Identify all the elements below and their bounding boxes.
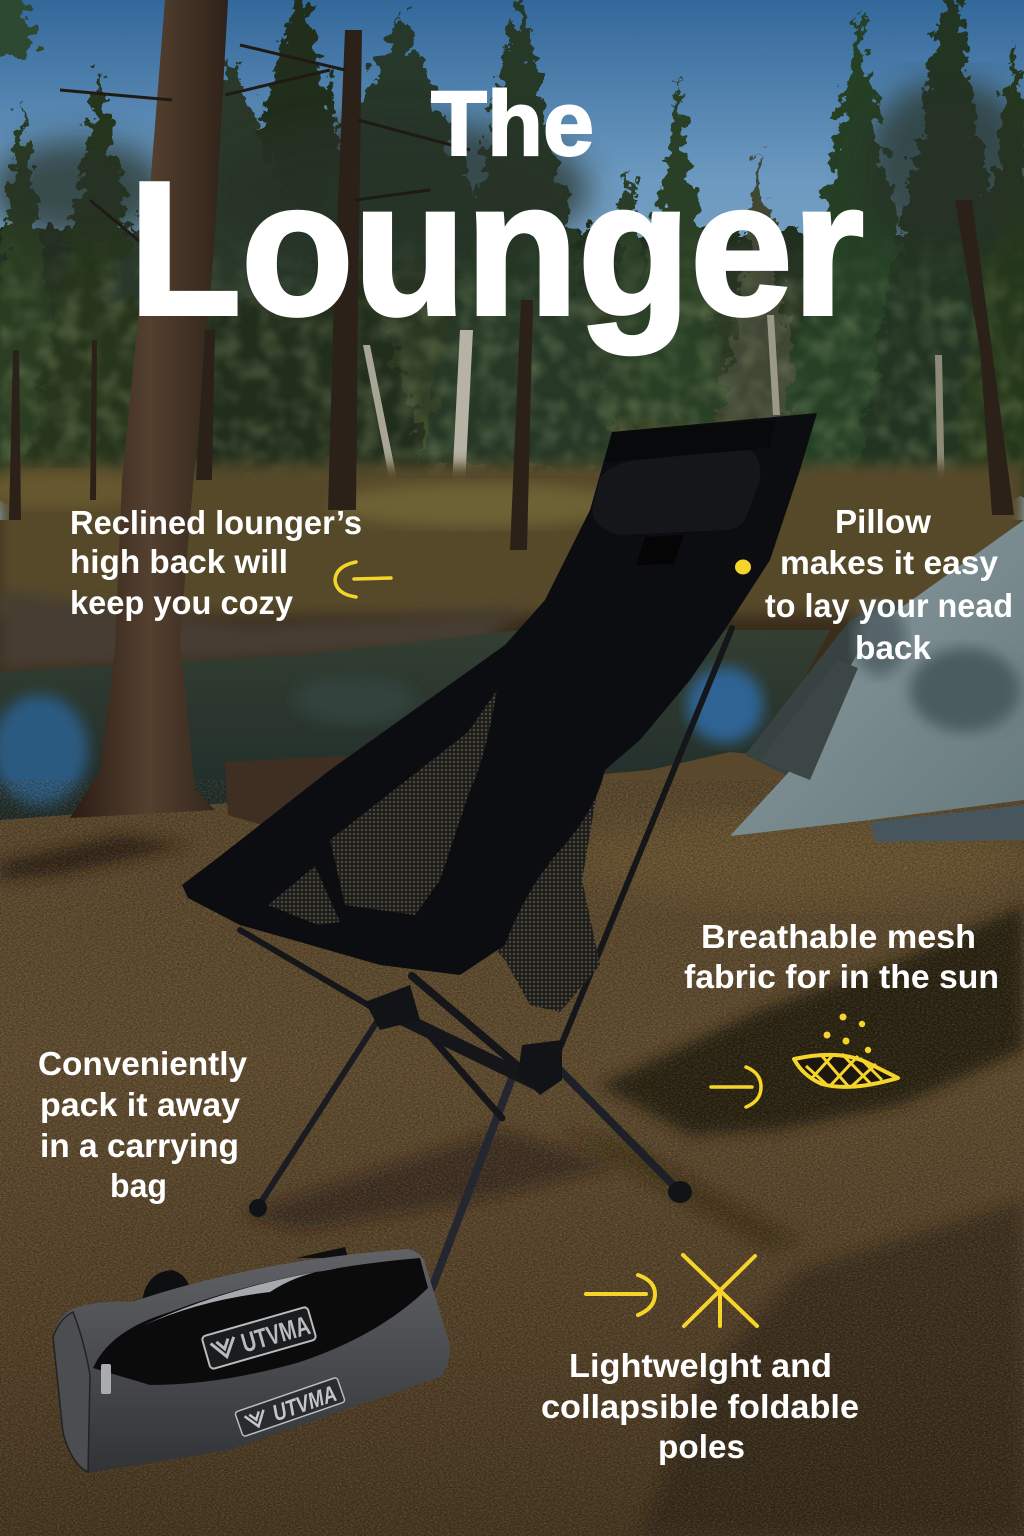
head pillow: [592, 449, 760, 535]
callout: carrying bag: Conveniently: [38, 1045, 248, 1082]
bag end panel: [53, 1312, 90, 1472]
callout: pillow: makes it easy: [780, 544, 999, 581]
marker dot: pillow: [735, 560, 751, 574]
bag zipper pull: [101, 1364, 111, 1394]
bag inner label: UTVMA: [238, 1310, 313, 1358]
foliage haze behind title: [0, 80, 1024, 260]
chair feet and hubs: [249, 985, 692, 1217]
callout: foldable poles: poles: [658, 1428, 745, 1465]
title: Lounger: [129, 143, 864, 355]
main pine trunk: [70, 0, 228, 818]
title: The: [431, 73, 594, 175]
far bank: [0, 590, 520, 670]
callout: foldable poles: collapsible foldable: [541, 1388, 859, 1425]
callout: breathable mesh: fabric for in the sun: [684, 958, 999, 995]
callout: pillow: back: [855, 629, 932, 666]
callout: breathable mesh: Breathable mesh: [701, 918, 976, 955]
forest treeline: [0, 0, 1024, 500]
chair: [182, 413, 817, 1288]
ground shadows: [0, 835, 1024, 1536]
callout: breathable mesh: [684, 918, 999, 995]
distant trunks: [9, 30, 1014, 550]
grass grain: [0, 780, 1024, 1536]
bag handles: [142, 1247, 348, 1302]
bag outer label: UTVMA: [269, 1380, 340, 1426]
carrying bag: [53, 1247, 450, 1473]
callout: reclined back: [70, 504, 362, 621]
arrow: breathable mesh: [711, 1067, 761, 1107]
callout: carrying bag: pack it away: [40, 1086, 241, 1123]
chair fabric: [182, 413, 817, 975]
callout: reclined back: high back will: [70, 543, 288, 580]
lower forest light: [0, 251, 1024, 470]
bag inner label: [201, 1306, 317, 1370]
water: [0, 630, 830, 825]
bag opening: [93, 1258, 428, 1385]
callout: reclined back: keep you cozy: [70, 584, 294, 621]
callout: pillow: to lay your nead: [765, 587, 1013, 624]
firepit: [225, 755, 362, 825]
callout: carrying bag: [38, 1045, 248, 1204]
arrow: foldable poles: [586, 1275, 655, 1315]
branches: [60, 45, 470, 250]
pillow strap: [636, 535, 684, 565]
light birch trunks: [363, 315, 945, 525]
icon: mesh fabric with air dots: [794, 1014, 898, 1087]
arrow: reclined back: [335, 562, 391, 597]
callout: pillow: [765, 503, 1013, 666]
icon: crossed poles: [683, 1255, 757, 1326]
meadow: [0, 465, 1024, 615]
callout: carrying bag: bag: [110, 1167, 167, 1204]
pocket mesh: [475, 775, 600, 1012]
bag outer label: [235, 1377, 346, 1438]
callout: foldable poles: Lightwelght and: [569, 1347, 832, 1384]
grass light flecks: [0, 780, 1024, 1536]
callout: pillow: Pillow: [835, 503, 931, 540]
callout: foldable poles: [541, 1347, 859, 1465]
side mesh: [268, 866, 340, 925]
top strap: [605, 420, 775, 462]
chair frame legs: [240, 628, 732, 1288]
callout: reclined back: Reclined lounger’s: [70, 504, 362, 541]
callout: carrying bag: in a carrying: [40, 1127, 239, 1164]
seat mesh: [330, 690, 497, 915]
bag lining: [142, 1268, 340, 1326]
ground: [0, 752, 1024, 1536]
tent: [730, 520, 1024, 842]
